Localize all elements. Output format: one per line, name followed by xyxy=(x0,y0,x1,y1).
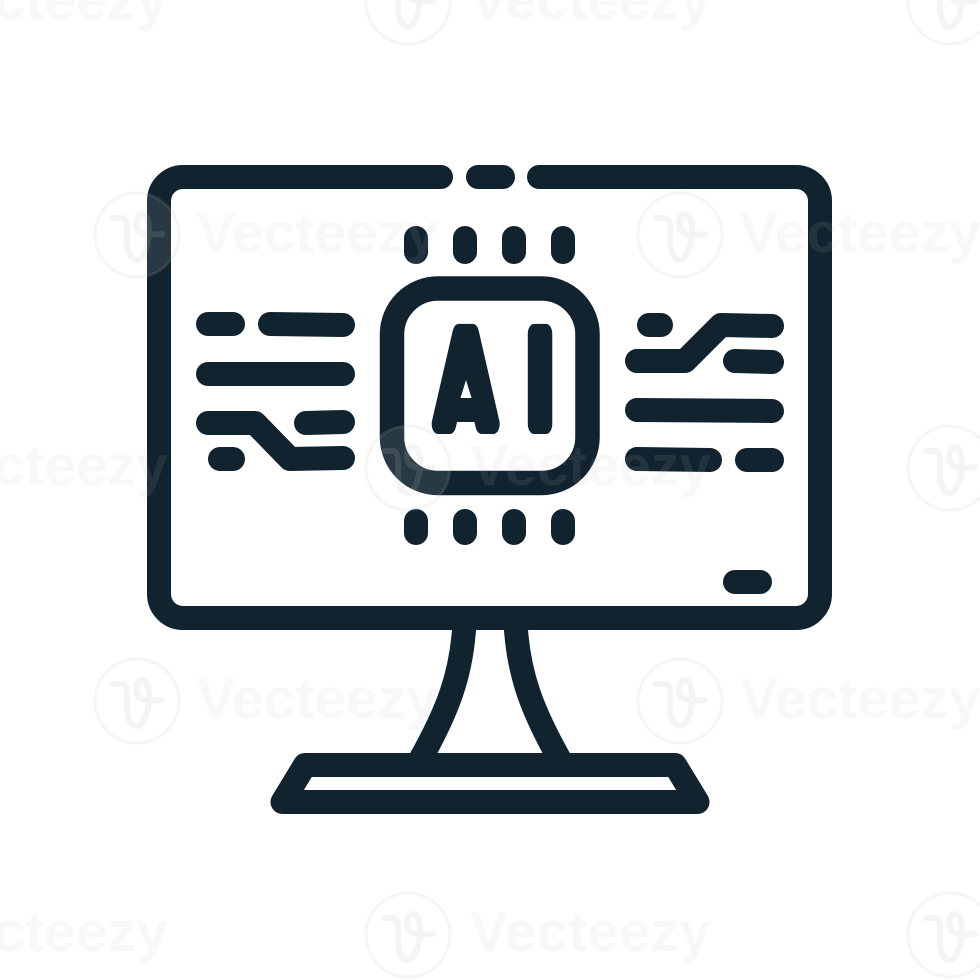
watermarks: Vecteezy xyxy=(197,667,438,731)
left circuit lines xyxy=(208,324,343,459)
chip pins: top xyxy=(416,238,563,252)
chip label: AI xyxy=(436,307,552,453)
monitor screen frame xyxy=(159,177,820,618)
monitor base xyxy=(282,765,698,802)
chip label: AI: I xyxy=(529,307,552,453)
monitor stand neck xyxy=(420,622,560,760)
watermarks: Vecteezy xyxy=(740,667,980,731)
watermarks: Vecteezy xyxy=(740,201,980,265)
watermarks: Vecteezy xyxy=(470,434,711,498)
chip pins: bottom xyxy=(416,521,563,533)
watermarks: Vecteezy xyxy=(470,900,711,964)
power indicator xyxy=(735,570,760,594)
chip body xyxy=(392,288,588,483)
chip label: AI: A xyxy=(436,307,496,453)
watermarks: Vecteezy xyxy=(197,201,438,265)
right circuit lines xyxy=(637,325,772,460)
